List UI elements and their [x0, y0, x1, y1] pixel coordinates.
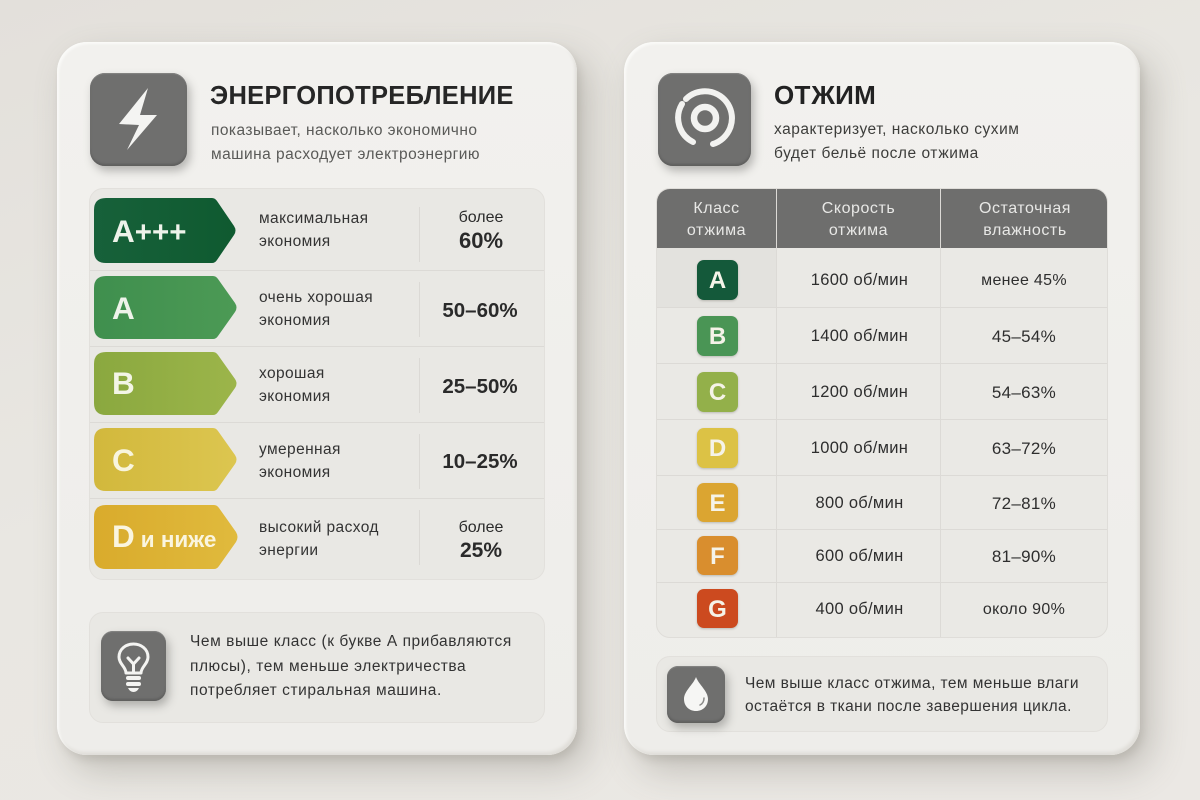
- value: over 25%: более: [459, 519, 503, 536]
- badge B: B: [709, 323, 726, 350]
- speed A: 1600 об/мин: [811, 271, 908, 289]
- row text: maximum economy: максимальная: [259, 210, 368, 227]
- row text: moderate economy: [259, 441, 341, 480]
- badge C: C: [709, 379, 726, 406]
- badge A: [697, 260, 738, 300]
- value: over 60%: более: [459, 209, 503, 226]
- spin subtitle: [774, 121, 1019, 162]
- badge D: [697, 428, 738, 468]
- speed D: 1000 об/мин: [811, 439, 908, 457]
- label: A: A: [112, 290, 135, 326]
- speed C: 1200 об/мин: [811, 383, 908, 401]
- value: over 60%: 60%: [459, 228, 503, 252]
- row text: moderate economy: умеренная: [259, 441, 341, 458]
- spin table: [656, 188, 1108, 638]
- row text: good economy: [259, 365, 331, 404]
- spin subtitle: будет бельё после отжима: [774, 145, 979, 162]
- spin title: ОТЖИМ: [774, 80, 876, 110]
- badge C: [697, 372, 738, 412]
- energy subtitle: [211, 122, 480, 163]
- badge E: [697, 483, 738, 522]
- value: over 25%: [459, 519, 503, 562]
- header: class: Класс: [693, 200, 740, 217]
- callout text: [745, 675, 1079, 715]
- label: D and below: D и ниже: [112, 518, 216, 554]
- moisture B: 45–54%: [992, 327, 1056, 346]
- value: 10–25%: 10–25%: [442, 450, 518, 473]
- label: B: B: [112, 365, 135, 401]
- header: speed: отжима: [829, 222, 888, 239]
- row text: high energy use: энергии: [259, 542, 318, 558]
- moisture F: 81–90%: [992, 547, 1056, 566]
- panel: energy consumption: [57, 42, 577, 755]
- row text: high energy use: высокий расход: [259, 519, 379, 536]
- value: over 60%: [459, 209, 503, 252]
- class arrows: [94, 198, 238, 569]
- row text: good economy: хорошая: [259, 365, 325, 382]
- row text: maximum economy: [259, 210, 368, 250]
- row text: good economy: экономия: [259, 388, 331, 404]
- icon: water drop: [667, 666, 725, 723]
- panel: spin class: [624, 42, 1140, 755]
- row text: high energy use: [259, 519, 379, 558]
- icon: spin rings: [658, 73, 751, 166]
- icon: light bulb: [101, 631, 166, 701]
- row text: very good economy: очень хорошая: [259, 289, 373, 306]
- header: moisture: влажность: [983, 222, 1067, 239]
- speed F: 600 об/мин: [816, 547, 904, 565]
- moisture A: менее 45%: [981, 272, 1067, 289]
- header: speed: Скорость: [822, 200, 895, 217]
- badge G: [697, 589, 738, 628]
- callout text: Чем выше класс отжима, тем меньше влаги: [745, 675, 1079, 692]
- label: A+++: A+++: [112, 213, 186, 249]
- callout text: потребляет стиральная машина.: [190, 682, 442, 699]
- table header: [656, 188, 1108, 248]
- callout text: [190, 633, 512, 699]
- header: moisture: Остаточная: [979, 200, 1071, 217]
- speed B: 1400 об/мин: [811, 327, 908, 345]
- moisture G: около 90%: [983, 601, 1065, 618]
- value: 50–60%: 50–60%: [442, 299, 518, 322]
- callout text: остаётся в ткани после завершения цикла.: [745, 698, 1072, 715]
- spin callout: [656, 656, 1108, 732]
- energy title: ЭНЕРГОПОТРЕБЛЕНИЕ: [210, 82, 514, 110]
- energy subtitle: машина расходует электроэнергию: [211, 146, 480, 163]
- speed E: 800 об/мин: [816, 494, 904, 512]
- callout text: плюсы), тем меньше электричества: [190, 658, 466, 674]
- row text: maximum economy: экономия: [259, 232, 331, 250]
- badge A: A: [709, 267, 726, 294]
- value: over 25%: 25%: [460, 539, 502, 562]
- label: C: C: [112, 442, 135, 478]
- moisture D: 63–72%: [992, 439, 1056, 458]
- row text: very good economy: [259, 289, 373, 328]
- badge G: G: [708, 596, 727, 623]
- icon: lightning bolt: [90, 73, 187, 166]
- badge B: [697, 316, 738, 356]
- badge E: E: [709, 490, 726, 517]
- badge F: [697, 536, 738, 575]
- header: speed: [822, 200, 895, 239]
- badge D: D: [709, 435, 726, 462]
- energy classes table: [89, 188, 545, 580]
- moisture E: 72–81%: [992, 494, 1056, 513]
- header: moisture: [979, 200, 1071, 239]
- row text: very good economy: экономия: [259, 312, 331, 328]
- callout text: Чем выше класс (к букве А прибавляются: [190, 633, 512, 650]
- header: class: [687, 200, 746, 239]
- speed G: 400 об/мин: [816, 600, 904, 618]
- spin subtitle: характеризует, насколько сухим: [774, 121, 1019, 138]
- energy subtitle: показывает, насколько экономично: [211, 122, 477, 139]
- badge F: F: [710, 543, 725, 570]
- row text: moderate economy: экономия: [259, 464, 331, 480]
- moisture C: 54–63%: [992, 383, 1056, 402]
- energy callout: [89, 612, 545, 723]
- value: 25–50%: 25–50%: [442, 375, 518, 398]
- header: class: отжима: [687, 222, 746, 239]
